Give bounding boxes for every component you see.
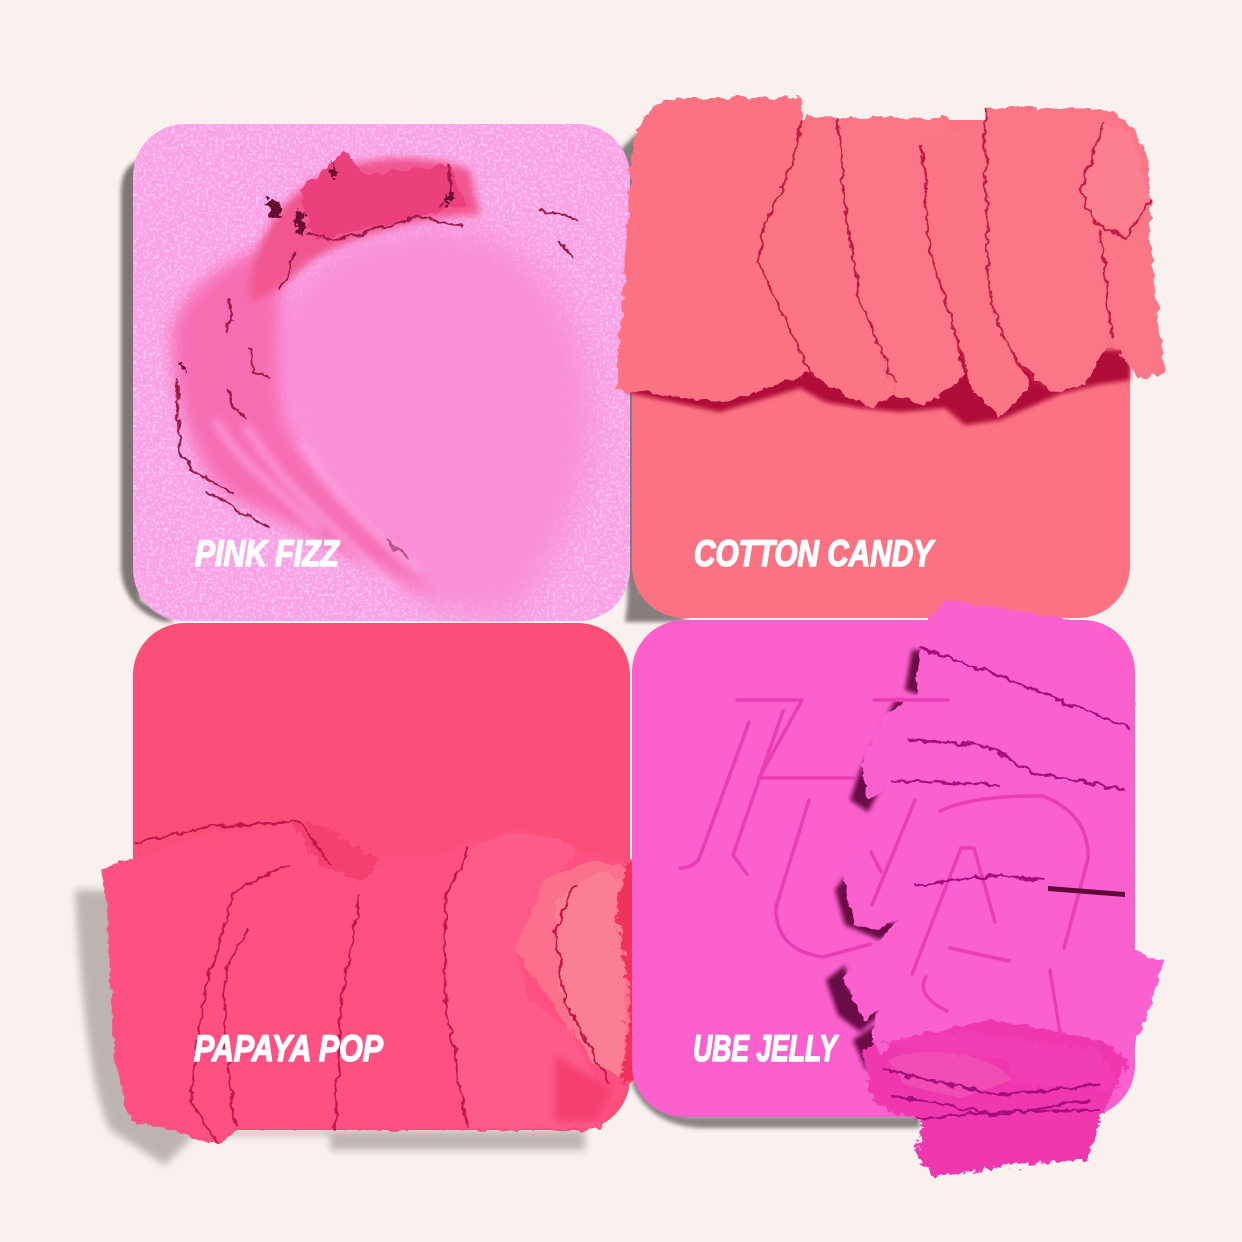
panel: Cotton Candy pan xyxy=(616,98,1165,618)
label: Cotton Candy: COTTON CANDY xyxy=(694,533,936,574)
crack lines xyxy=(177,163,577,560)
lower crumbled powder xyxy=(864,1010,1130,1177)
embossed logo xyxy=(680,700,1088,1033)
pan base xyxy=(632,620,1135,1117)
shimmer texture xyxy=(133,124,630,621)
pan base xyxy=(133,124,630,621)
dark chips xyxy=(180,160,455,373)
crumbled edge xyxy=(290,822,676,1085)
swept powder centre xyxy=(272,227,592,618)
panel: Pink Fizz pan xyxy=(133,124,630,621)
broken powder flakes xyxy=(616,98,1165,418)
shine streaks xyxy=(215,420,420,590)
label: Pink Fizz: PINK FIZZ xyxy=(195,533,340,574)
pan base xyxy=(632,120,1130,618)
upper broken flakes xyxy=(842,600,1164,1060)
panel: Ube Jelly pan xyxy=(632,600,1164,1177)
pan base xyxy=(133,623,630,1130)
label: Papaya Pop: PAPAYA POP xyxy=(194,1028,383,1069)
flake cracks xyxy=(135,822,610,1145)
pressed dish in crumble xyxy=(888,1052,1012,1098)
flake cracks xyxy=(757,108,1150,388)
pale corner bruise xyxy=(555,1055,612,1122)
flake cracks xyxy=(880,648,1130,1118)
label: Ube Jelly: UBE JELLY xyxy=(693,1028,839,1069)
top powder clump xyxy=(250,158,480,300)
left powder ridge xyxy=(172,240,440,600)
pan shadows xyxy=(75,130,920,1165)
broken powder flakes xyxy=(103,825,676,1145)
dark shadows beside flakes xyxy=(826,650,925,1070)
dark shadow below pressed flakes xyxy=(625,350,1130,425)
panel: Papaya Pop pan xyxy=(103,623,676,1145)
